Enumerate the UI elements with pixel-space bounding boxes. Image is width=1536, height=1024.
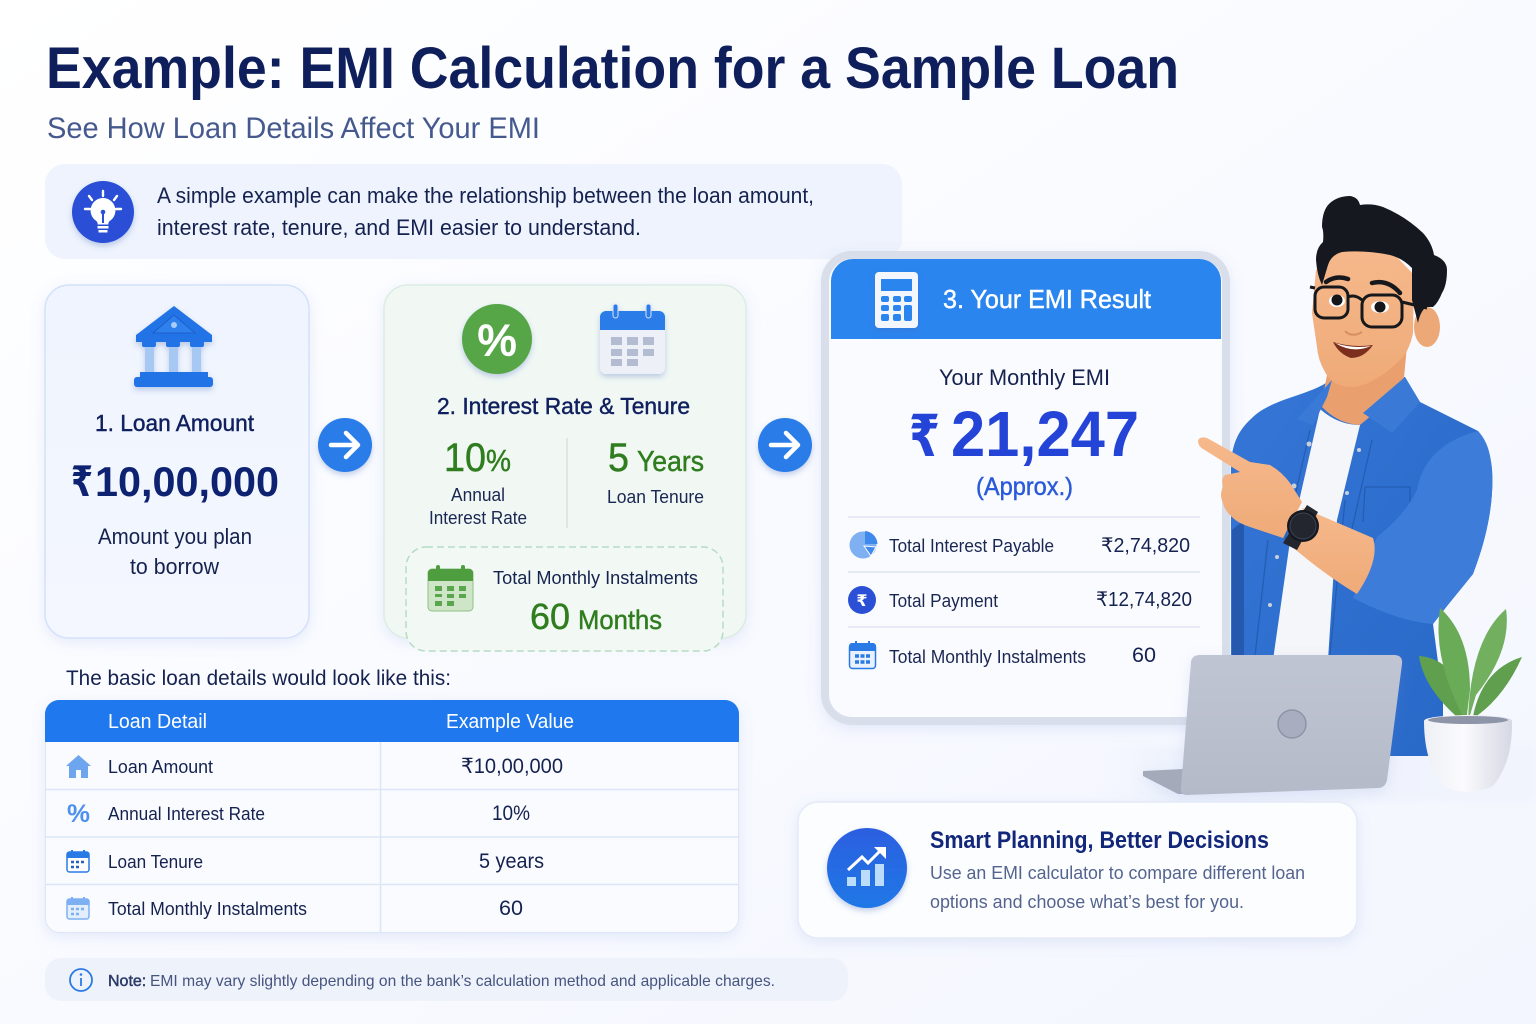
row: total monthly instalments result: 60 <box>1132 644 1156 667</box>
watch <box>1283 505 1319 550</box>
row: loan amount: ₹10,00,000 <box>461 755 563 778</box>
note bar: EMI may vary slightly depending on the bank’s calculation method and applicable charges. <box>150 973 775 990</box>
table: loan details <box>45 700 739 932</box>
heading: loan amount: 1. Loan Amount <box>95 410 255 436</box>
stat: interest rate <box>429 436 527 528</box>
eyebrows <box>1326 278 1400 293</box>
forearm <box>1290 508 1375 594</box>
result label: Your Monthly EMI <box>939 365 1110 390</box>
intro text <box>157 183 814 240</box>
icon: calculator <box>875 272 918 328</box>
heading: interest rate and tenure: 2. Interest Rate & Tenure <box>437 393 690 419</box>
intro text: A simple example can make the relationship between the loan amount, <box>157 183 814 208</box>
collar <box>1297 377 1420 433</box>
hand <box>1198 437 1302 538</box>
desk surface <box>1090 745 1536 802</box>
callout: total monthly instalments: Total Monthly Instalments <box>493 568 698 588</box>
value: loan amount: ₹ <box>71 458 93 505</box>
callout: total monthly instalments: Months <box>578 605 662 635</box>
row: loan amount <box>66 755 563 778</box>
panel: loan amount <box>45 285 309 638</box>
illustration: man pointing <box>1143 196 1522 795</box>
note bar: Note: <box>108 973 146 990</box>
icon: bank <box>134 306 213 387</box>
body: smart planning <box>930 862 1305 912</box>
panel: interest rate and tenure <box>384 285 746 651</box>
title: Example: EMI Calculation for a Sample Loan <box>46 36 1179 101</box>
stat: interest rate: % <box>486 443 511 478</box>
row: total monthly instalments: 60 <box>499 897 523 920</box>
sleeve <box>1353 431 1492 624</box>
eyes <box>1329 294 1389 313</box>
shirt body <box>1231 377 1492 756</box>
stat: tenure <box>607 436 704 507</box>
row: total payment: ₹12,74,820 <box>1096 589 1192 611</box>
glasses <box>1310 287 1427 327</box>
panel: smart planning <box>798 802 1357 938</box>
table header: Example Value <box>446 711 574 733</box>
divider <box>566 438 568 528</box>
shirt buttons <box>1268 442 1361 607</box>
row: loan tenure <box>67 850 544 873</box>
table header <box>108 711 574 733</box>
value: loan amount: 10,00,000 <box>95 458 279 505</box>
row: loan tenure: 5 years <box>479 850 544 873</box>
body: smart planning: Use an EMI calculator to compare different loan <box>930 862 1305 883</box>
row: total payment: Total Payment <box>889 591 998 611</box>
teeth <box>1335 343 1371 349</box>
nose <box>1345 331 1362 335</box>
mouth <box>1333 342 1373 358</box>
icon: growth chart <box>827 828 907 908</box>
row: total payment: ₹ <box>856 593 868 610</box>
row: total monthly instalments result: Total Monthly Instalments <box>889 647 1086 667</box>
plant <box>1419 608 1522 792</box>
white tee <box>1273 409 1360 660</box>
row: loan tenure: Loan Tenure <box>108 852 203 872</box>
row: total monthly instalments <box>67 897 523 920</box>
result approx: (Approx.) <box>976 473 1073 501</box>
laptop <box>1143 655 1402 795</box>
shirt placket and pocket <box>1255 430 1410 656</box>
row: total monthly instalments: Total Monthly Instalments <box>108 899 307 919</box>
row: total interest payable: Total Interest Payable <box>889 536 1054 556</box>
icon: green calendar <box>428 565 473 611</box>
row: annual interest rate: Annual Interest Rate <box>108 804 265 824</box>
table header: Loan Detail <box>108 711 207 733</box>
intro callout <box>45 164 902 259</box>
arrow: step 1 to step 2 <box>318 418 372 472</box>
icon: percent: % <box>477 316 517 365</box>
result header <box>831 259 1221 339</box>
stat: interest rate: 10 <box>444 436 486 480</box>
callout: total monthly instalments <box>406 547 723 651</box>
result header: 3. Your EMI Result <box>943 284 1152 314</box>
subtitle: See How Loan Details Affect Your EMI <box>47 112 540 145</box>
result value: ₹ <box>909 404 940 469</box>
stat: tenure: Years <box>637 446 704 478</box>
body: smart planning: options and choose what’s best for you. <box>930 891 1244 912</box>
row: total monthly instalments result <box>849 641 1156 668</box>
row: loan amount: Loan Amount <box>108 757 213 777</box>
note bar <box>45 958 848 1001</box>
ear <box>1414 307 1440 347</box>
row: annual interest rate: 10% <box>492 802 530 825</box>
stat: tenure: Loan Tenure <box>607 487 704 507</box>
caption: loan amount <box>98 524 252 579</box>
hair <box>1316 196 1447 323</box>
row: total interest payable <box>850 531 1190 558</box>
icon: percent <box>462 304 532 374</box>
row: total interest payable: ₹2,74,820 <box>1101 535 1190 557</box>
pot <box>1424 715 1512 792</box>
stat: interest rate: Interest Rate <box>429 508 527 528</box>
table intro text: The basic loan details would look like this: <box>66 667 451 690</box>
neck <box>1321 345 1407 425</box>
caption: loan amount: to borrow <box>130 554 219 579</box>
heading: smart planning: Smart Planning, Better Decisions <box>930 827 1269 854</box>
result value: 21,247 <box>951 398 1139 470</box>
caption: loan amount: Amount you plan <box>98 524 252 549</box>
icon: light bulb <box>72 181 134 243</box>
shirt shadow strip <box>1232 520 1244 655</box>
icon: calendar <box>600 304 665 374</box>
arrow: step 2 to step 3 <box>758 418 812 472</box>
row: annual interest rate <box>67 800 530 828</box>
face <box>1312 245 1414 387</box>
panel: EMI result <box>825 255 1226 721</box>
leaves <box>1419 608 1522 722</box>
intro text: interest rate, tenure, and EMI easier to understand. <box>157 215 641 240</box>
callout: total monthly instalments: 60 <box>530 596 570 637</box>
stat: interest rate: Annual <box>451 485 505 505</box>
stat: tenure: 5 <box>608 436 629 480</box>
row: annual interest rate: % <box>67 800 90 828</box>
icon: info <box>70 969 92 991</box>
row: total payment <box>848 586 1192 614</box>
